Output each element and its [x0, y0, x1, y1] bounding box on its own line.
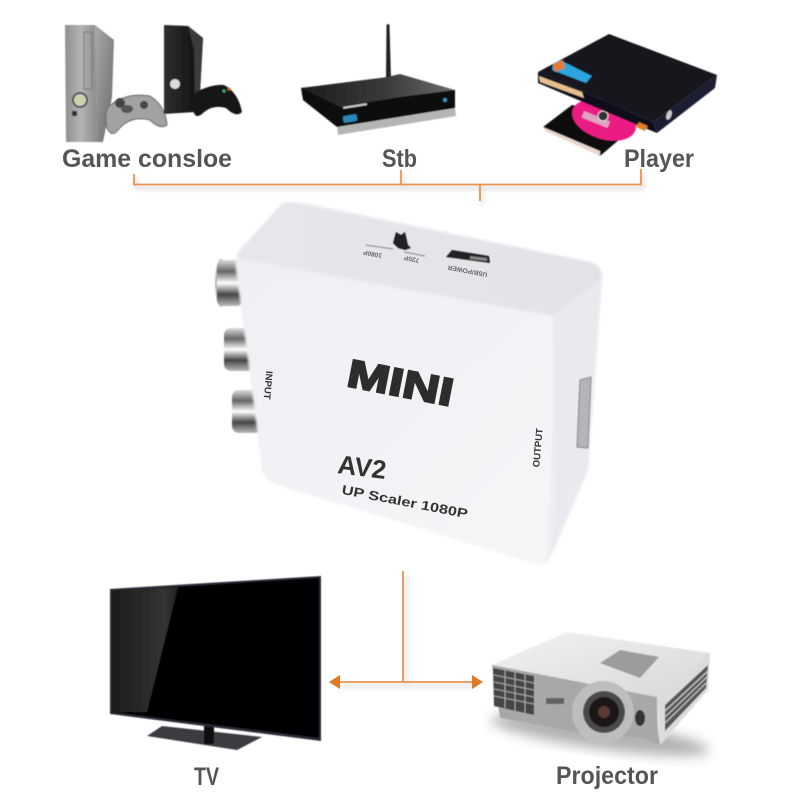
adapter: MINI AV2 converter box [215, 202, 602, 564]
icon: television [110, 576, 321, 750]
icon: projector [489, 632, 711, 764]
labels on top of box [362, 248, 488, 278]
switch and USB port [366, 232, 490, 263]
label: Projector: Projector [556, 762, 658, 790]
text: UP Scaler 1080P: UP Scaler 1080P [341, 482, 470, 521]
labels on top of box: USB/POWER [447, 263, 488, 278]
label: Game consloe: Game consloe [62, 145, 232, 173]
text: OUTPUT: OUTPUT [531, 428, 546, 468]
logo: MINI: MINI [344, 352, 457, 415]
icon: HDMI output port [577, 377, 591, 448]
label: Player: Player [624, 145, 694, 173]
icon: game consoles and controllers [65, 25, 242, 142]
connector: source devices bracket [134, 169, 643, 204]
icon: arrowhead to TV [329, 675, 340, 689]
icon: DVD player with disc tray [538, 34, 717, 156]
text: INPUT: INPUT [261, 371, 274, 400]
label: TV: TV [194, 763, 219, 791]
icon: arrowhead to projector [472, 675, 483, 689]
icon: set-top box [301, 24, 456, 135]
box body [236, 202, 602, 564]
connector: output arrows [329, 571, 483, 689]
icon: RCA input connectors [215, 259, 262, 433]
labels on top of box: 1080P [362, 248, 383, 259]
text: AV2: AV2 [336, 449, 388, 485]
label: Stb: Stb [382, 145, 417, 173]
labels on top of box: 720P [403, 253, 420, 263]
